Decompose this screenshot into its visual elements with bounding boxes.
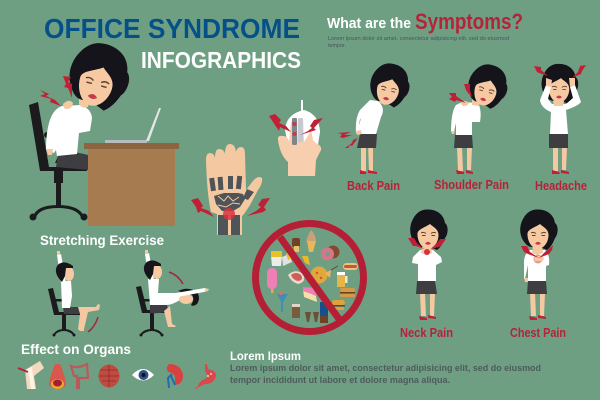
text block: symptoms intro: Lorem ipsum dolor sit amet, consectetur adipisicing elit, sed do eiusmod (328, 36, 509, 42)
food: fries (271, 251, 293, 266)
laptop (105, 140, 147, 143)
pain bolts (40, 90, 61, 106)
icon: intestine (71, 364, 88, 388)
heading: symptoms: Symptoms? (415, 9, 523, 34)
food: ice cream (306, 230, 316, 252)
text block: lorem ipsum: tempor incididunt ut labore et dolore magna aliqua. (230, 375, 450, 386)
food: bottle (320, 302, 328, 323)
food: meat (288, 271, 304, 284)
figure: shoulder pain (449, 60, 513, 174)
figure: chest pain (520, 209, 558, 320)
skirt seated (56, 152, 88, 170)
food: burgers (332, 288, 355, 310)
food: coffee (292, 304, 300, 318)
figure: neck pain (408, 209, 448, 320)
head (62, 37, 137, 115)
label: neck pain: Neck Pain (400, 325, 453, 340)
label: back pain: Back Pain (347, 178, 400, 193)
heading: effect on organs: Effect on Organs (21, 341, 131, 357)
text block: lorem ipsum: Lorem Ipsum (230, 349, 301, 363)
chair (29, 102, 88, 220)
food: cocktail (277, 291, 288, 312)
text block: symptoms intro (328, 36, 509, 49)
prohibition ring (256, 224, 364, 332)
food: popsicle (267, 268, 277, 293)
food: pizza (310, 266, 338, 284)
hand on shoulder (63, 101, 73, 109)
food: glasses (305, 312, 319, 322)
icon: eye (132, 369, 154, 380)
white blouse (46, 105, 92, 156)
food: cake slice (302, 256, 310, 265)
heading: stretching exercise: Stretching Exercise (40, 232, 164, 248)
text block: lorem ipsum: Lorem ipsum dolor sit amet, consectetur adipisicing elit, sed do eiusmod (230, 363, 541, 374)
text block: lorem ipsum (230, 349, 541, 386)
neck (79, 95, 90, 108)
food: chocolate bar (292, 238, 300, 252)
icon: artery (49, 364, 66, 389)
text block: symptoms intro: tempor. (328, 43, 346, 49)
food: beer (337, 272, 348, 287)
icon: stomach (196, 364, 216, 388)
food: hot dog (343, 263, 358, 270)
illustration: seated stretch two (136, 250, 209, 336)
illustration: wrist pain hand (191, 144, 270, 235)
illustration: seated stretch one (48, 251, 100, 336)
food: strawberry cake (303, 287, 317, 302)
figure: back pain (337, 60, 414, 174)
icon: no junk food sign (256, 224, 364, 332)
icon: brain (98, 364, 120, 388)
icon: knee (18, 361, 44, 389)
icon: kidney (167, 364, 183, 388)
food: donuts (321, 246, 340, 260)
icons: organs row (18, 361, 216, 389)
label: chest pain: Chest Pain (510, 325, 566, 340)
title (44, 13, 301, 73)
label: shoulder pain: Shoulder Pain (434, 177, 509, 192)
illustration: mouse hand with finger pain (269, 100, 323, 176)
label: headache: Headache (535, 178, 587, 193)
figure: headache (534, 64, 586, 174)
title: INFOGRAPHICS (141, 47, 301, 73)
title: OFFICE SYNDROME (44, 13, 300, 44)
illustration: woman at desk with neck pain (29, 37, 179, 226)
heading: symptoms: What are the (327, 15, 411, 32)
desk (88, 148, 175, 226)
heading: symptoms (327, 9, 523, 34)
